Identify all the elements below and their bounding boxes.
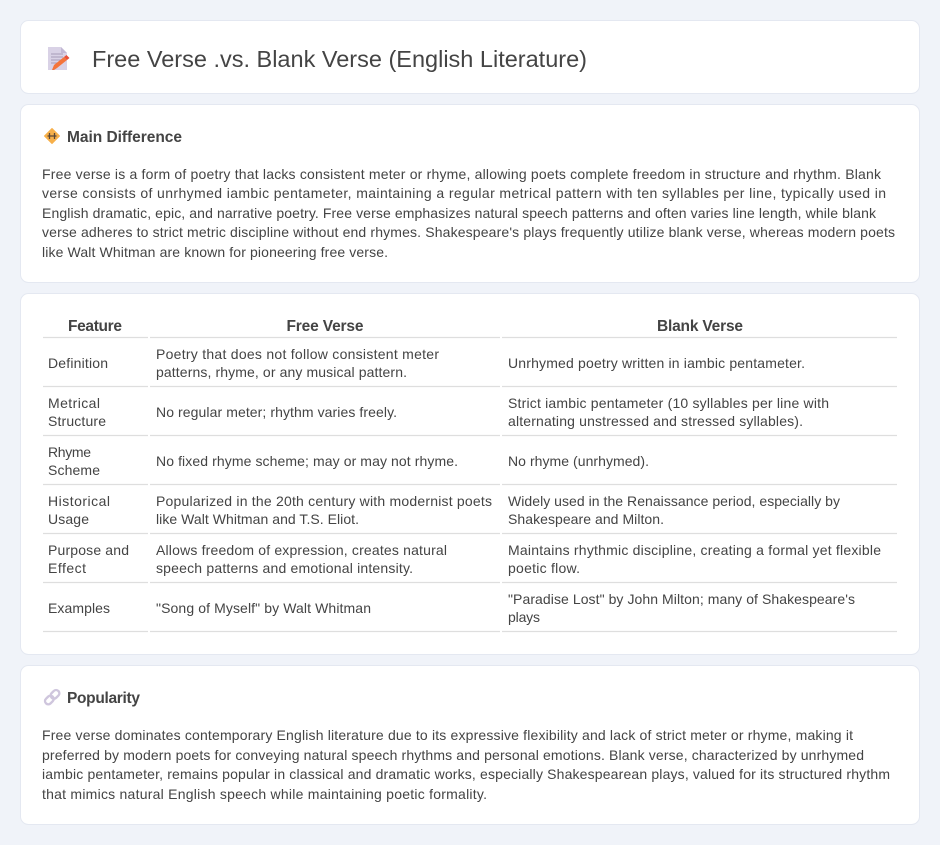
table row: historical usage: [48, 493, 840, 527]
table header row: Blank Verse: [657, 318, 743, 335]
table row: purpose and effect: speech patterns and emotional intensity.: [156, 560, 413, 576]
table row: purpose and effect: Allows freedom of expression, creates natural: [156, 542, 447, 558]
table row: rhyme scheme: No rhyme (unrhymed).: [508, 453, 649, 469]
table row: examples: [48, 591, 855, 625]
table row: historical usage: Popularized in the 20th century with modernist poets: [156, 493, 492, 509]
text block: popularity body: preferred by modern poets for conveying natural speech rhythms and personal emotions. Blank verse, characterized by unrhymed: [42, 747, 864, 763]
title: Free Verse .vs. Blank Verse (English Literature): [92, 46, 587, 72]
panel: popularity: [20, 666, 920, 824]
table row: metrical structure: alternating unstressed and stressed syllables).: [508, 413, 803, 429]
table row: purpose and effect: Effect: [48, 560, 86, 576]
table row: metrical structure: [48, 395, 829, 429]
table row: metrical structure: Metrical: [48, 395, 100, 411]
text block: popularity body: that mimics natural English speech while maintaining poetic formality.: [42, 786, 487, 802]
text block: popularity body: Free verse dominates contemporary English literature due to its expressive flexibility and lack of strict meter or rhyme, making it: [42, 727, 853, 743]
text block: main difference body: verse consists of unrhymed iambic pentameter, maintaining a regular metrical pattern with ten syllables per line, typically used in: [42, 185, 886, 201]
table row: metrical structure: Strict iambic pentameter (10 syllables per line with: [508, 395, 829, 411]
table row: examples: plays: [508, 609, 540, 625]
panel: main difference: [20, 104, 920, 282]
text block: main difference body: English dramatic, epic, and narrative poetry. Free verse emphasizes natural speech patterns and often varies line length, while blank: [42, 205, 877, 221]
table row: historical usage: Widely used in the Renaissance period, especially by: [508, 493, 840, 509]
table row: purpose and effect: Purpose and: [48, 542, 129, 558]
icon: document with pencil: [48, 47, 70, 70]
table row: definition: patterns, rhyme, or any musical pattern.: [156, 364, 407, 380]
table row: purpose and effect: Maintains rhythmic discipline, creating a formal yet flexible: [508, 542, 881, 558]
icon: warning diamond: [44, 128, 60, 144]
table row: purpose and effect: [48, 542, 881, 576]
table row: historical usage: Shakespeare and Milton.: [508, 511, 664, 527]
text block: popularity body: [42, 727, 890, 802]
table row: examples: "Song of Myself" by Walt Whitman: [156, 600, 371, 616]
text block: main difference body: [42, 166, 895, 260]
table row: rhyme scheme: No fixed rhyme scheme; may or may not rhyme.: [156, 453, 458, 469]
table row: rhyme scheme: Scheme: [48, 462, 100, 478]
table header row: Feature: [68, 318, 122, 335]
table row: historical usage: Historical: [48, 493, 110, 509]
table row: metrical structure: No regular meter; rhythm varies freely.: [156, 404, 397, 420]
table row: rhyme scheme: Rhyme: [48, 444, 91, 460]
text block: popularity body: iambic pentameter, remains popular in classical and dramatic works, especially Shakespearean plays, valued for its structured rhythm: [42, 766, 890, 782]
table row: metrical structure: Structure: [48, 413, 106, 429]
heading: main difference: Main Difference: [67, 129, 182, 146]
panel: title header: [20, 20, 920, 94]
icon: chain link: [44, 689, 61, 706]
text block: main difference body: Free verse is a form of poetry that lacks consistent meter or rhyme, allowing poets complete freedom in structure and rhythm. Blank: [42, 166, 882, 182]
table row: purpose and effect: poetic flow.: [508, 560, 580, 576]
text block: main difference body: verse adheres to strict metric discipline without end rhymes. Shakespeare's plays frequently utilize blank verse, whereas modern poets: [42, 224, 895, 240]
table row: historical usage: Usage: [48, 511, 89, 527]
table row: examples: "Paradise Lost" by John Milton; many of Shakespeare's: [508, 591, 855, 607]
table row: definition: Poetry that does not follow consistent meter: [156, 346, 439, 362]
table row: examples: Examples: [48, 600, 110, 616]
table row: rhyme scheme: [48, 444, 649, 478]
table header row: Free Verse: [286, 318, 364, 335]
table row: definition: Unrhymed poetry written in iambic pentameter.: [508, 355, 805, 371]
panel: comparison table: [20, 294, 920, 654]
table row: definition: [48, 346, 805, 380]
table header row: [68, 318, 743, 335]
table row: historical usage: like Walt Whitman and T.S. Eliot.: [156, 511, 359, 527]
text block: main difference body: like Walt Whitman are known for pioneering free verse.: [42, 244, 388, 260]
table row: definition: Definition: [48, 355, 108, 371]
heading: popularity: Popularity: [67, 690, 140, 707]
